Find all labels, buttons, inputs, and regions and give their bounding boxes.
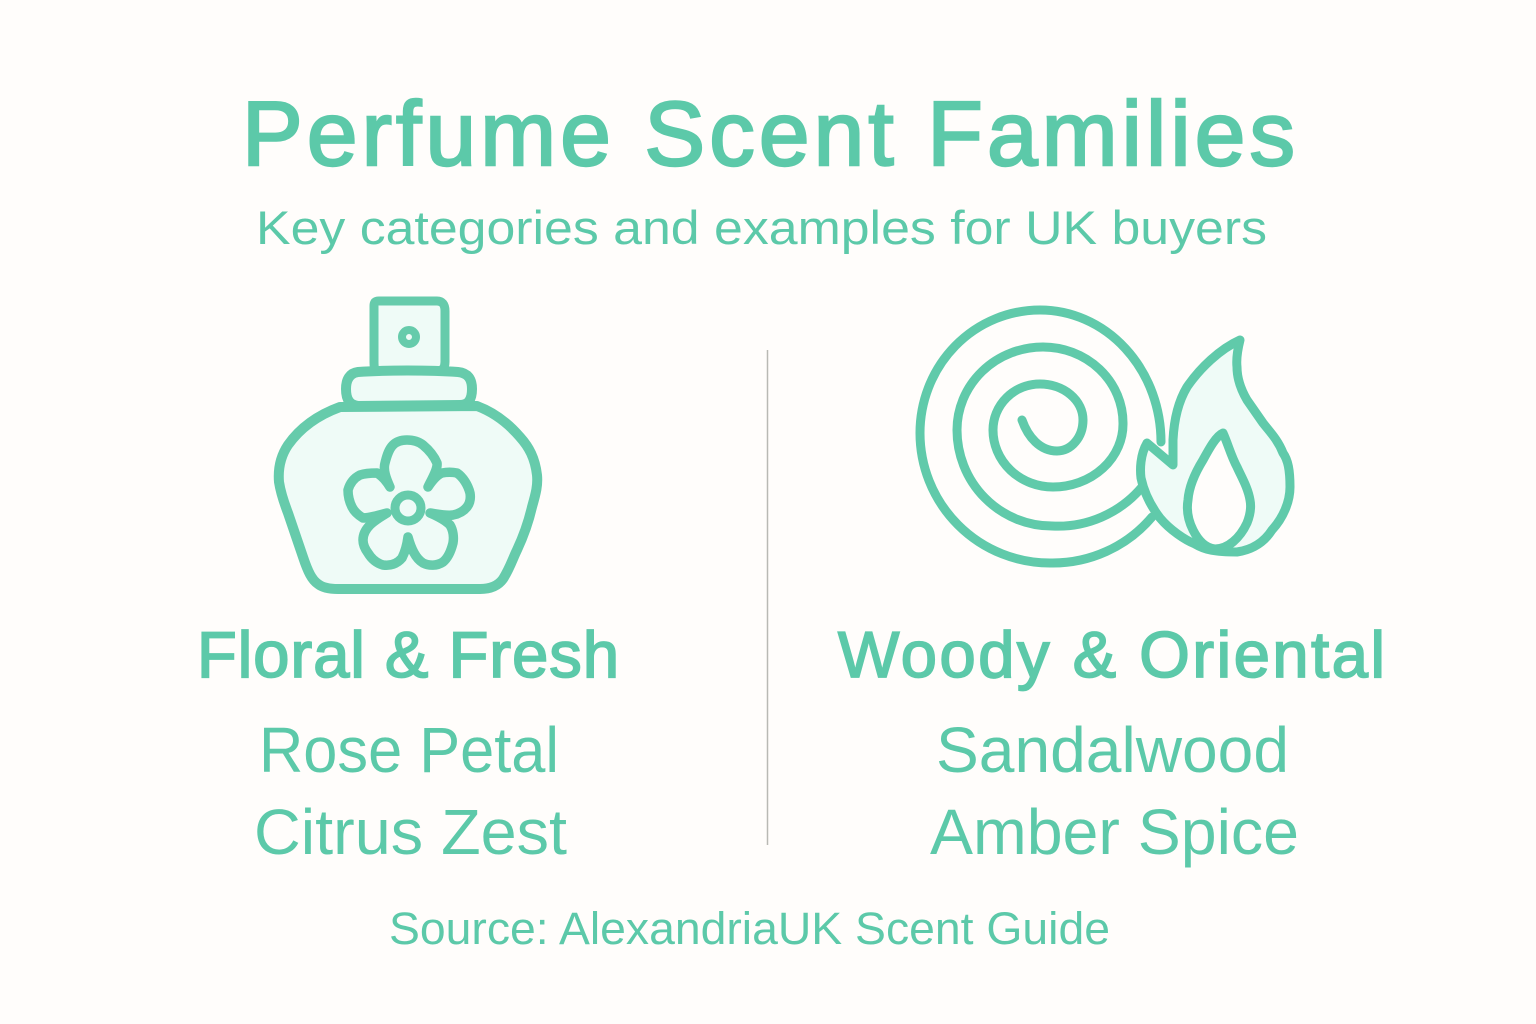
spray nozzle xyxy=(402,330,416,344)
item: Citrus Zest: Citrus Zest xyxy=(254,796,567,868)
icon: perfume bottle with flower xyxy=(279,301,537,589)
incense coil spiral xyxy=(920,310,1161,563)
bottle collar xyxy=(346,370,472,406)
heading: Floral & Fresh: Floral & Fresh xyxy=(197,618,619,691)
divider xyxy=(766,350,768,845)
source note: Source: AlexandriaUK Scent Guide xyxy=(389,903,1110,954)
item: Rose Petal: Rose Petal xyxy=(259,714,559,786)
icon: incense coil and flame xyxy=(920,310,1290,563)
flower petals xyxy=(348,440,470,565)
title: Perfume Scent Families xyxy=(242,84,1295,185)
inner flame xyxy=(1187,433,1251,549)
subtitle: Key categories and examples for UK buyers xyxy=(256,201,1267,254)
spray cap xyxy=(374,301,445,373)
item: Amber Spice: Amber Spice xyxy=(930,796,1299,868)
flame outline xyxy=(1141,340,1290,552)
item: Sandalwood: Sandalwood xyxy=(936,714,1289,786)
bottle body xyxy=(279,406,537,589)
flower centre xyxy=(395,495,421,521)
heading: Woody & Oriental: Woody & Oriental xyxy=(838,618,1385,691)
